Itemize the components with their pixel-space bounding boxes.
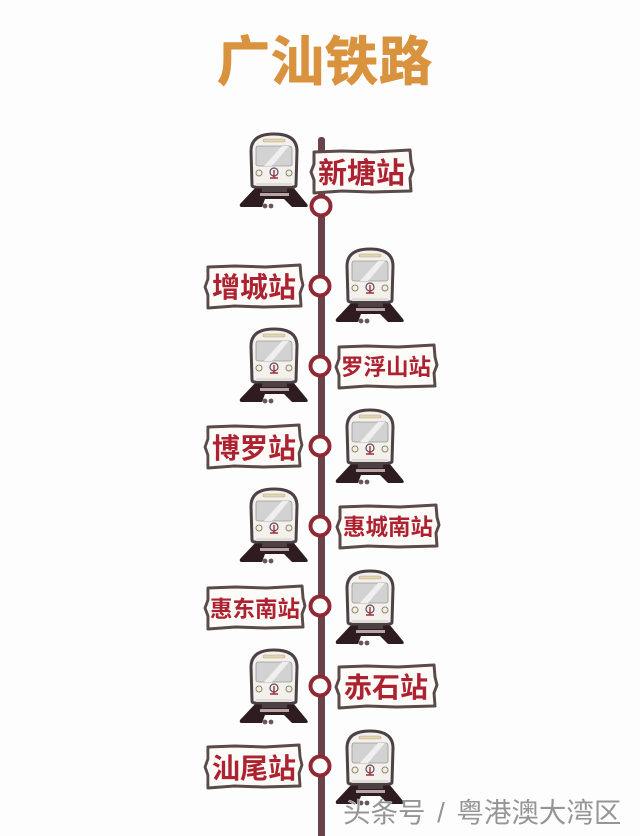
station marker 1 bbox=[312, 196, 330, 216]
sign 6: 惠东南站 bbox=[210, 597, 300, 622]
sign 1 bbox=[311, 150, 413, 193]
sign 4: 博罗站 bbox=[212, 433, 296, 464]
train icon right 4 bbox=[336, 410, 404, 484]
station 8: 汕尾站 bbox=[205, 731, 404, 805]
sign 2 bbox=[205, 265, 303, 308]
sign 7 bbox=[336, 665, 437, 708]
train icon right 8 bbox=[336, 731, 404, 805]
station 1: 新塘站 bbox=[240, 134, 413, 216]
station marker 8 bbox=[310, 756, 330, 776]
sign 5: 惠城南站 bbox=[343, 514, 433, 540]
sign 8 bbox=[205, 745, 302, 788]
train icon left 1 bbox=[240, 134, 308, 208]
sign 3 bbox=[336, 345, 437, 388]
sign 7: 赤石站 bbox=[344, 672, 428, 703]
sign 6 bbox=[205, 586, 305, 629]
train icon left 5 bbox=[240, 489, 308, 563]
sign 4 bbox=[205, 425, 302, 468]
sign 1: 新塘站 bbox=[318, 157, 405, 190]
station marker 5 bbox=[310, 516, 330, 536]
train icon right 6 bbox=[336, 571, 404, 645]
station 7: 赤石站 bbox=[240, 650, 437, 724]
sign 8: 汕尾站 bbox=[212, 753, 296, 784]
title: 广汕铁路 bbox=[217, 33, 433, 92]
station marker 6 bbox=[310, 596, 330, 616]
railway line bbox=[318, 137, 325, 836]
station 6: 惠东南站 bbox=[205, 571, 404, 645]
station 4: 博罗站 bbox=[205, 410, 404, 484]
station 2: 增城站 bbox=[205, 249, 404, 323]
sign 5 bbox=[337, 505, 439, 548]
watermark: 头条号 / 粤港澳大湾区 bbox=[343, 797, 621, 828]
train icon left 3 bbox=[240, 329, 308, 403]
train icon right 2 bbox=[336, 249, 404, 323]
train icon left 7 bbox=[240, 650, 308, 724]
station marker 2 bbox=[310, 276, 330, 296]
station 5: 惠城南站 bbox=[240, 489, 439, 563]
sign 3: 罗浮山站 bbox=[341, 355, 431, 380]
station marker 4 bbox=[310, 436, 330, 456]
station 3: 罗浮山站 bbox=[240, 329, 437, 403]
station marker 7 bbox=[310, 676, 330, 696]
sign 2: 增城站 bbox=[212, 272, 296, 303]
station marker 3 bbox=[310, 356, 330, 376]
